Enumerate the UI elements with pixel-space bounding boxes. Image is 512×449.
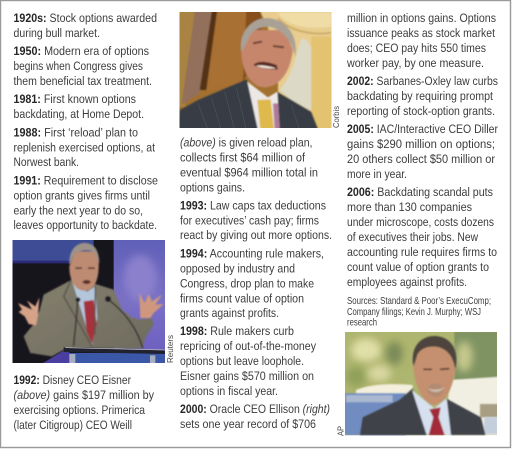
text block: 1992 continued to 2000 entries: sets one year record of $706 [180, 417, 316, 431]
text block: 1992 continued to 2000 entries: collects first $64 million of [180, 150, 306, 164]
text block: 1992 entry: 1992: Disney CEO Eisner [14, 373, 131, 387]
text block: 2000 continued to 2006 entries: worker pay, by one measure. [346, 56, 484, 70]
text block: 1992 continued to 2000 entries: opposed by industry and [180, 262, 295, 276]
photo: Disney CEO Eisner at podium [12, 238, 167, 365]
text block: 1920s to 1991 entries: 1988: First ‘reload’ plan to [14, 126, 138, 140]
text block: 1992 entry: (above) gains $197 million by [14, 388, 155, 402]
text block: 1920s to 1991 entries: begins when Congress gives [14, 59, 143, 73]
text block: 1992 continued to 2000 entries: 1993: Law caps tax deductions [180, 198, 326, 212]
text block: 1992 entry: (later Citigroup) CEO Weill [14, 418, 132, 432]
text block: 1992 continued to 2000 entries: options gains. [180, 180, 245, 194]
text block: 2000 continued to 2006 entries: does; CEO pay hits 550 times [347, 41, 486, 55]
text block: 1992 continued to 2000 entries: 1994: Accounting rule makers, [180, 246, 324, 260]
text block: 2000 continued to 2006 entries: more in year. [347, 167, 407, 181]
text block: 2000 continued to 2006 entries: 20 others collect $50 million or [347, 152, 495, 166]
text block: 1992 continued to 2000 entries: grants against profits. [180, 306, 279, 320]
photo: Citigroup CEO Weill [178, 10, 333, 130]
text block: 1920s to 1991 entries: during bull market. [14, 26, 100, 40]
text block: 1920s to 1991 entries: option grants gives firms until [14, 188, 150, 202]
photo credit: Corbis: Corbis [331, 106, 341, 128]
text block: 1992 continued to 2000 entries: 1998: Rule makers curb [180, 324, 294, 338]
text block: 1920s to 1991 entries: replenish exercised options, at [14, 140, 155, 154]
text block: 1920s to 1991 entries: 1920s: Stock options awarded [14, 11, 157, 25]
text block: 1992 continued to 2000 entries: options but leave loophole. [180, 354, 304, 368]
text block: 1992 continued to 2000 entries: firms count value of option [180, 292, 304, 306]
photo: Oracle CEO Ellison [343, 330, 499, 435]
text block: 2000 continued to 2006 entries: backdating by requiring prompt [347, 89, 493, 103]
text block: 1992 continued to 2000 entries: Eisner gains $570 million on [180, 369, 314, 383]
text block: 2000 continued to 2006 entries: employees against profits. [347, 275, 467, 289]
text block: 1920s to 1991 entries: 1991: Requirement to disclose [14, 174, 158, 188]
text block: 1992 entry [14, 373, 155, 432]
text block: 2000 continued to 2006 entries: count value of option grants to [347, 260, 489, 274]
photo credit: Reuters: Reuters [165, 335, 175, 363]
text block: 1992 continued to 2000 entries: (above) is given reload plan, [180, 136, 312, 150]
text block: 1920s to 1991 entries: early the next year to do so, [14, 204, 143, 218]
text block: 1992 continued to 2000 entries: 2000: Oracle CEO Ellison (right) [180, 402, 330, 416]
text block: 2000 continued to 2006 entries: of executives their jobs. New [347, 230, 478, 244]
text block: 1992 continued to 2000 entries: react by giving out more options. [180, 228, 332, 242]
sources note [347, 295, 491, 328]
text block: 1992 continued to 2000 entries: for executives’ cash pay; firms [180, 214, 319, 228]
text block: 1920s to 1991 entries: leaves opportunity to backdate. [14, 218, 157, 232]
text block: 1920s to 1991 entries: them beneficial tax treatment. [14, 74, 152, 88]
sources note: research [347, 316, 377, 328]
text block: 2000 continued to 2006 entries [346, 11, 498, 289]
text block: 1992 continued to 2000 entries: Congress, drop plan to make [180, 276, 314, 290]
text block: 2000 continued to 2006 entries: gains $290 million on options; [347, 137, 495, 151]
text block: 2000 continued to 2006 entries: 2006: Backdating scandal puts [347, 185, 493, 199]
text block: 1920s to 1991 entries: 1981: First known options [14, 92, 136, 106]
text block: 1992 continued to 2000 entries: eventual $964 million total in [180, 166, 318, 180]
text block: 1992 entry: exercising options. Primerica [14, 403, 145, 417]
text block: 1992 continued to 2000 entries: options in fiscal year. [180, 384, 278, 398]
text block: 1920s to 1991 entries: 1950: Modern era of options [14, 44, 149, 58]
text block: 1920s to 1991 entries [14, 11, 158, 232]
text block: 2000 continued to 2006 entries: more than 130 companies [347, 200, 472, 214]
text block: 1992 continued to 2000 entries: repricing of out-of-the-money [180, 339, 317, 353]
text block: 1920s to 1991 entries: backdating, at Home Depot. [14, 107, 144, 121]
photo credit: AP: AP [336, 426, 346, 436]
text block: 1992 continued to 2000 entries [180, 136, 332, 431]
text block: 1920s to 1991 entries: Norwest bank. [14, 155, 79, 169]
